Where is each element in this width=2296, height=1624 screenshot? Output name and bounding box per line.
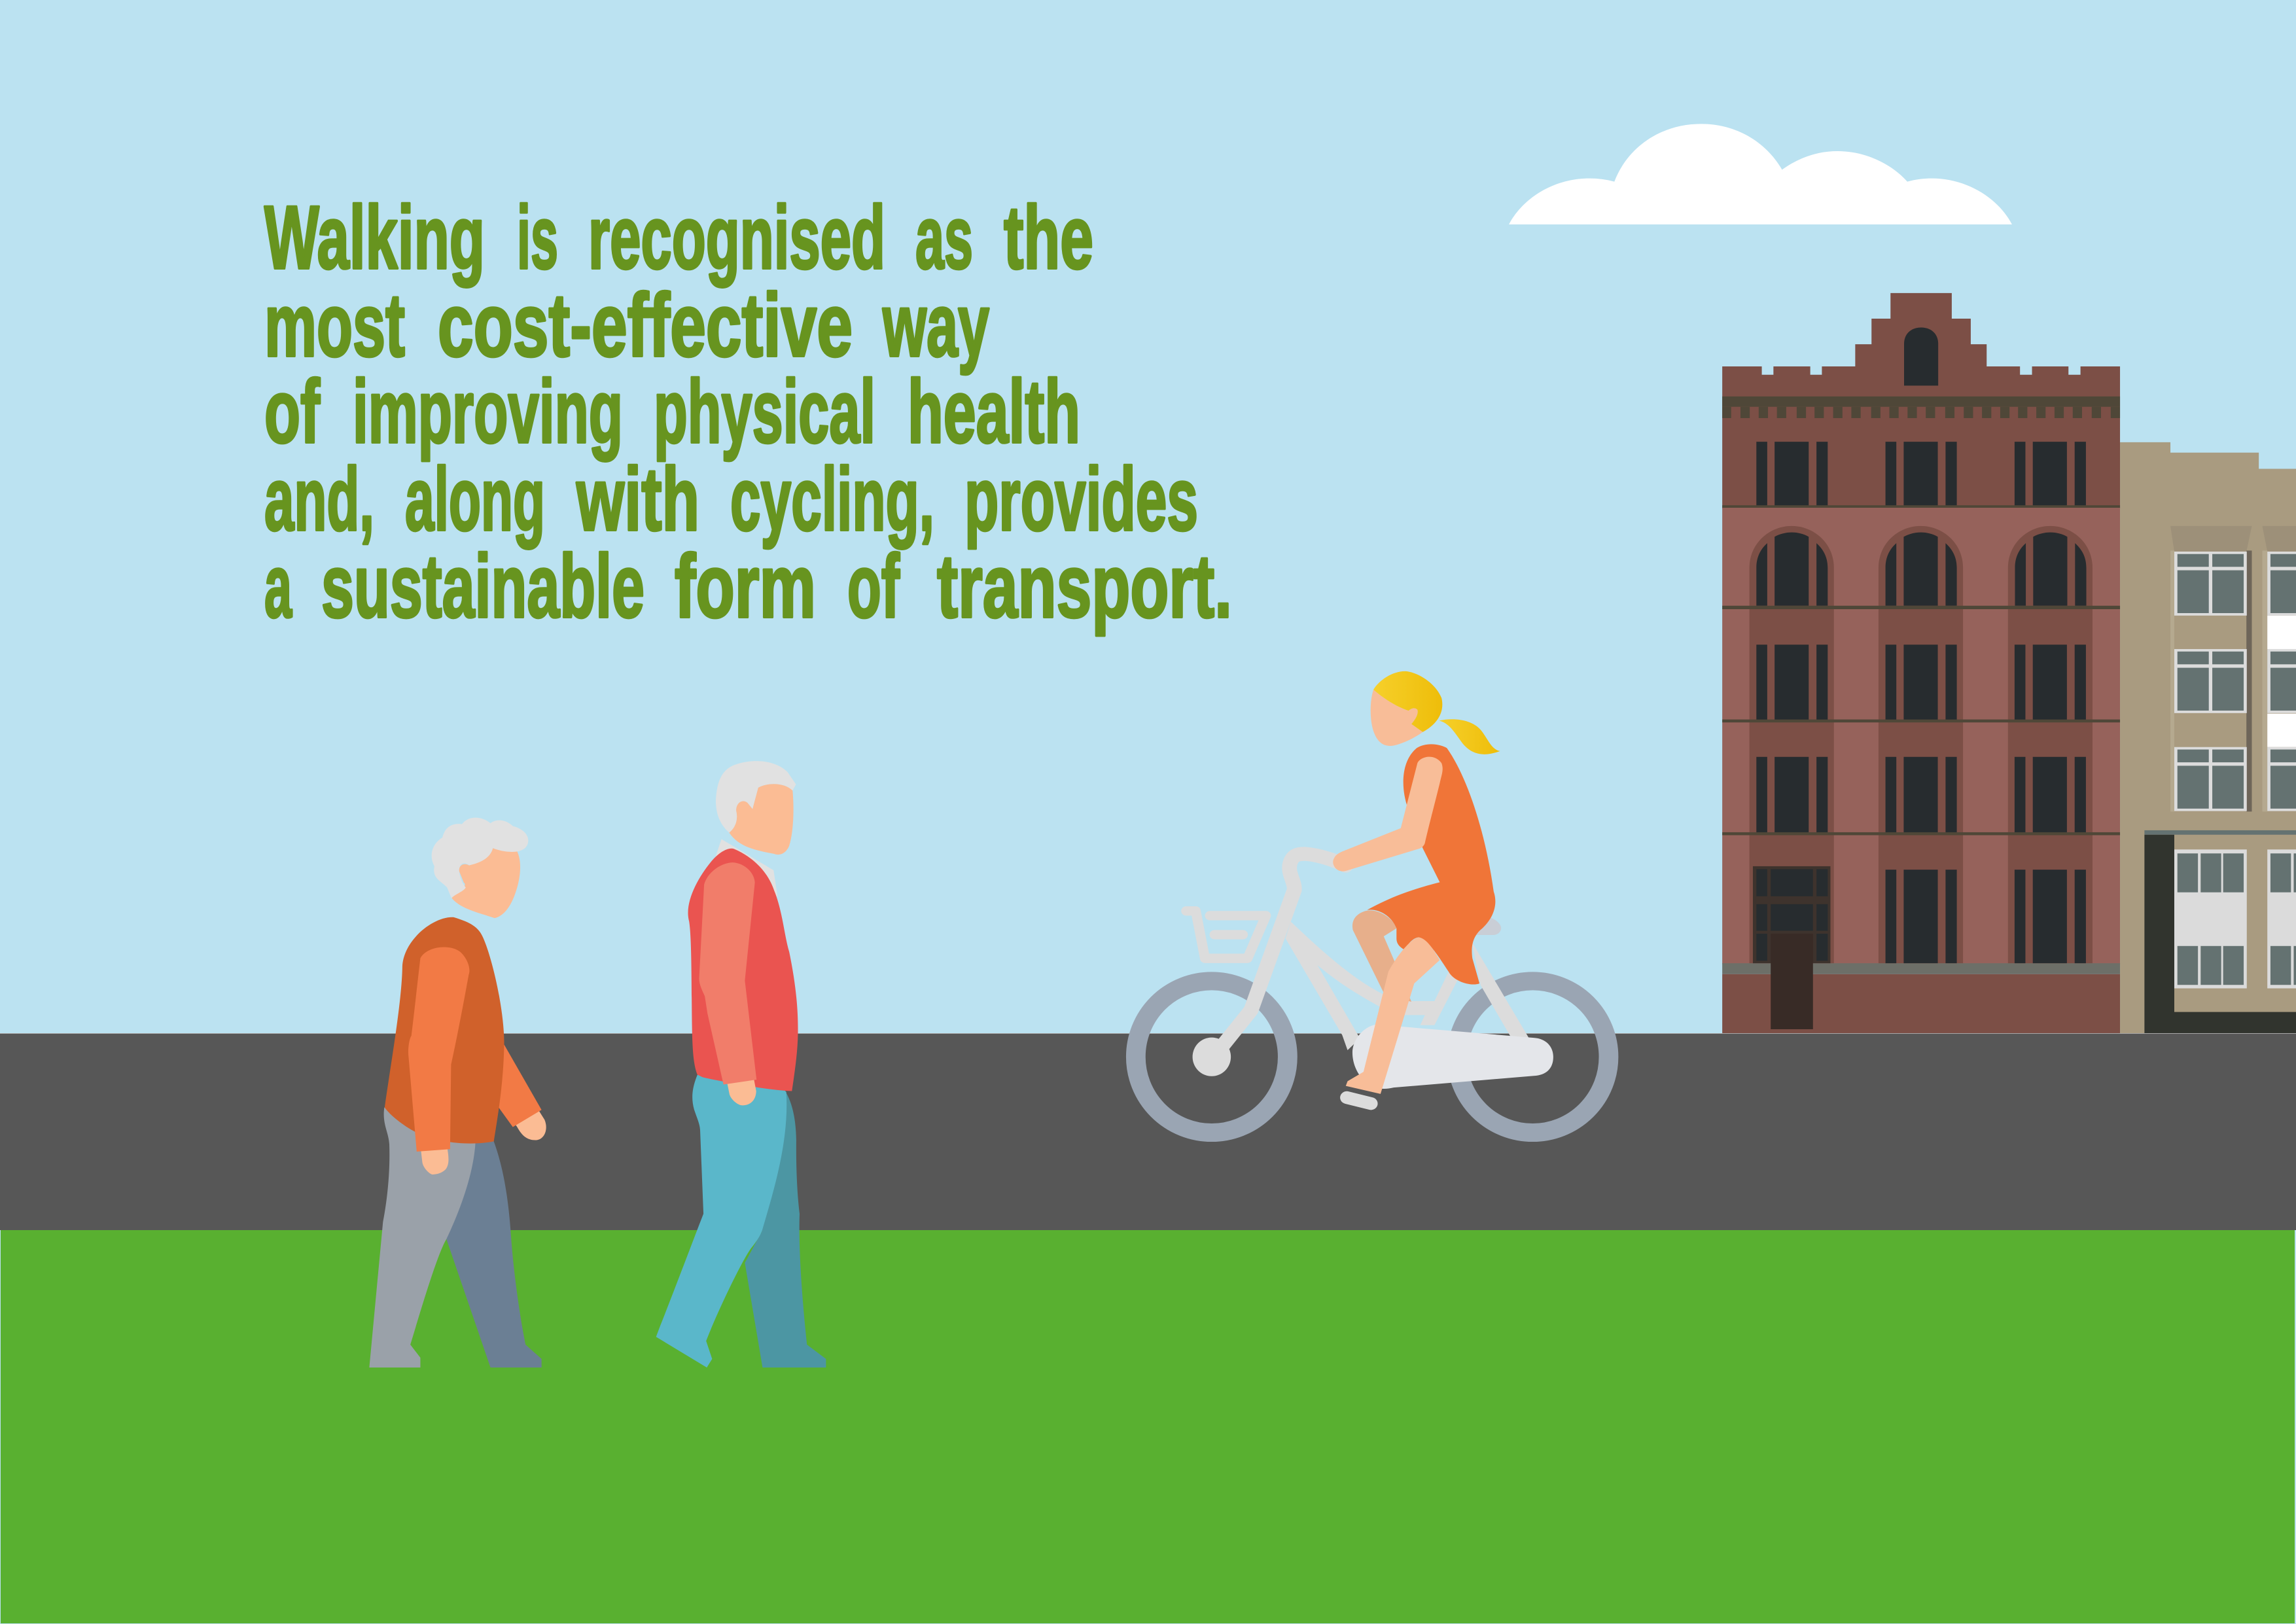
- headline text: physical: [654, 362, 875, 462]
- headline text: transport.: [937, 537, 1232, 637]
- headline text: of: [847, 537, 900, 637]
- cloud: [1509, 124, 2012, 224]
- headline text: a: [264, 537, 292, 637]
- headline text: way: [882, 275, 989, 376]
- headline text: form: [675, 537, 816, 637]
- headline text: is: [517, 188, 558, 288]
- older woman walking: [369, 818, 546, 1368]
- headline text: provides: [964, 450, 1198, 550]
- headline text: Walking: [264, 188, 485, 288]
- headline text: as: [915, 188, 973, 288]
- brick building: [1722, 293, 2120, 1033]
- grass: [1, 1230, 2295, 1623]
- cyclist on bicycle: [1136, 671, 1608, 1133]
- headline text: sustainable: [321, 537, 645, 637]
- headline text: of: [264, 362, 320, 462]
- headline text: the: [1004, 188, 1093, 288]
- bicycle: [1136, 854, 1608, 1133]
- headline text: improving: [353, 362, 623, 462]
- tan apartment building: [2120, 442, 2296, 1033]
- headline text: health: [908, 362, 1080, 462]
- headline text: cycling,: [730, 450, 934, 550]
- headline text: recognised: [588, 188, 885, 288]
- headline text: and,: [264, 450, 374, 550]
- older man walking: [656, 761, 826, 1368]
- headline text: cost-effective: [438, 275, 853, 376]
- headline text: along: [405, 450, 545, 550]
- headline text: with: [576, 450, 699, 550]
- headline text: most: [264, 275, 405, 376]
- rider: [1333, 671, 1500, 1094]
- headline text: [264, 188, 1232, 637]
- road: [0, 1033, 2296, 1230]
